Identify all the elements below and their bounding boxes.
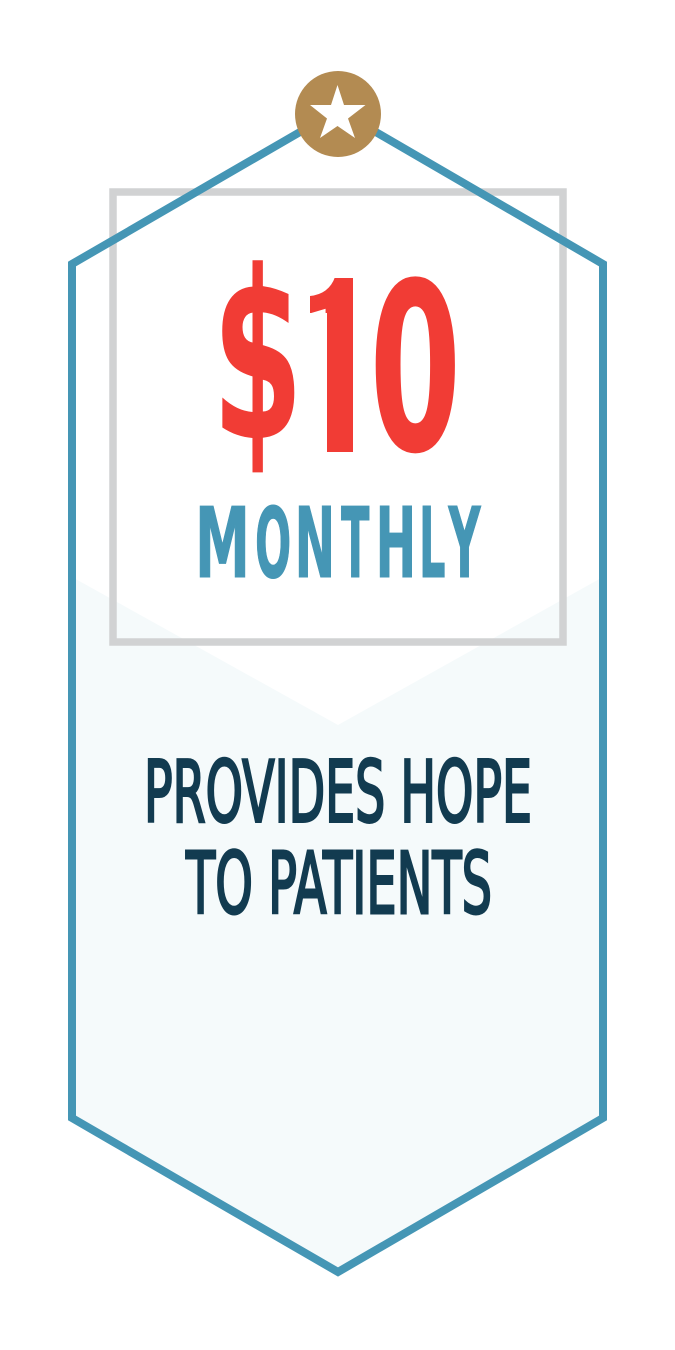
- heading: MONTHLY: T: [341, 487, 369, 600]
- heading: MONTHLY: M: [195, 487, 250, 600]
- icon: gold star badge: [295, 71, 381, 157]
- panel: blue hexagon outline: [72, 110, 603, 1272]
- heading: MONTHLY: O: [255, 486, 291, 600]
- text block: provides hope to patients: [144, 744, 532, 934]
- heading: MONTHLY: N: [295, 488, 335, 601]
- heading: $10 amount: [222, 260, 455, 472]
- heading: MONTHLY: H: [376, 488, 416, 601]
- heading: MONTHLY: L: [419, 487, 446, 600]
- heading: MONTHLY: [195, 486, 481, 601]
- panel: lower tinted background: [72, 577, 603, 1272]
- heading: $10 amount: $: [212, 221, 303, 494]
- heading: $10 amount: 1: [278, 231, 395, 510]
- badge graphic: [68, 71, 607, 1277]
- panel: grey square frame: [113, 192, 563, 642]
- heading: MONTHLY: Y: [448, 487, 481, 600]
- heading: $10 amount: 0: [369, 233, 461, 505]
